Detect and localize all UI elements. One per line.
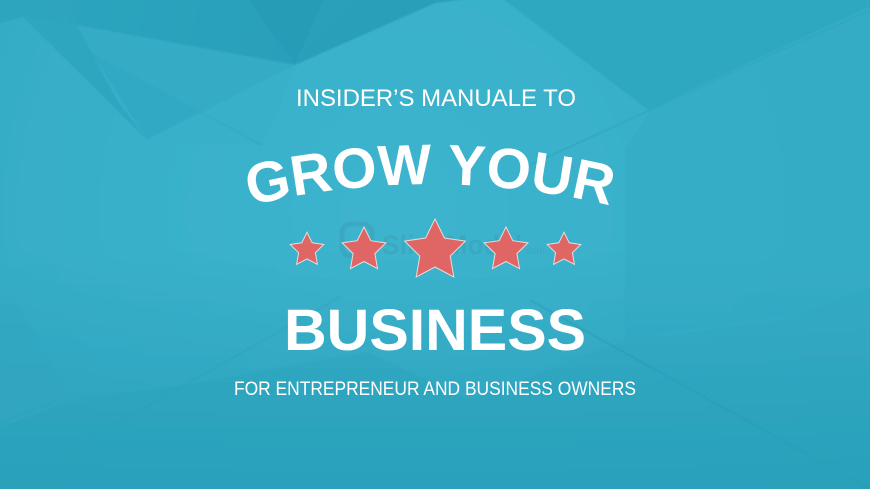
icon: five star rating: [290, 219, 581, 277]
star 3: [405, 219, 465, 277]
watermark: SlideModel: [382, 230, 522, 260]
star 4: [484, 227, 528, 269]
title: grow your (curved): GROW YOUR: [248, 144, 613, 206]
subheading: for entrepreneur and business owners: FOR ENTREPRENEUR AND BUSINESS OWNERS: [234, 378, 636, 400]
watermark: [342, 224, 545, 260]
star 5: [547, 232, 581, 264]
heading: insider's manuale to: INSIDER’S MANUALE TO: [296, 85, 576, 112]
star 2: [342, 227, 386, 269]
watermark: .com: [523, 246, 545, 257]
title: business: BUSINESS: [284, 298, 586, 363]
star 1: [290, 232, 324, 264]
